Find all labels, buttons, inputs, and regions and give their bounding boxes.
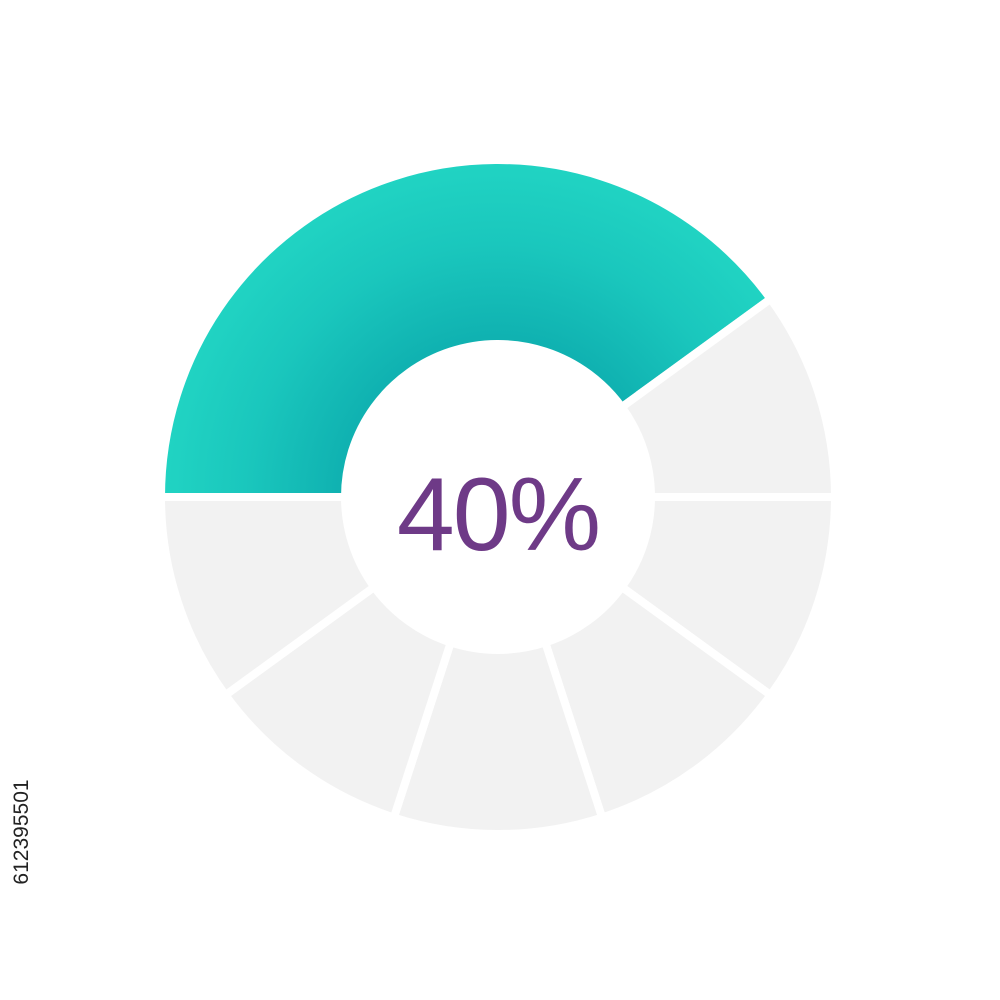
segment: teal 40% bbox=[161, 160, 771, 497]
segment: grey 1 bbox=[622, 299, 835, 497]
segment: grey 6 bbox=[161, 497, 374, 695]
segment: grey 4 bbox=[394, 642, 602, 834]
percentage label: 40% bbox=[397, 457, 599, 573]
segment: grey 3 bbox=[545, 587, 771, 818]
segment: grey 5 bbox=[225, 587, 451, 818]
segment: grey 2 bbox=[622, 497, 835, 695]
side id text: 612395501 bbox=[10, 779, 33, 885]
